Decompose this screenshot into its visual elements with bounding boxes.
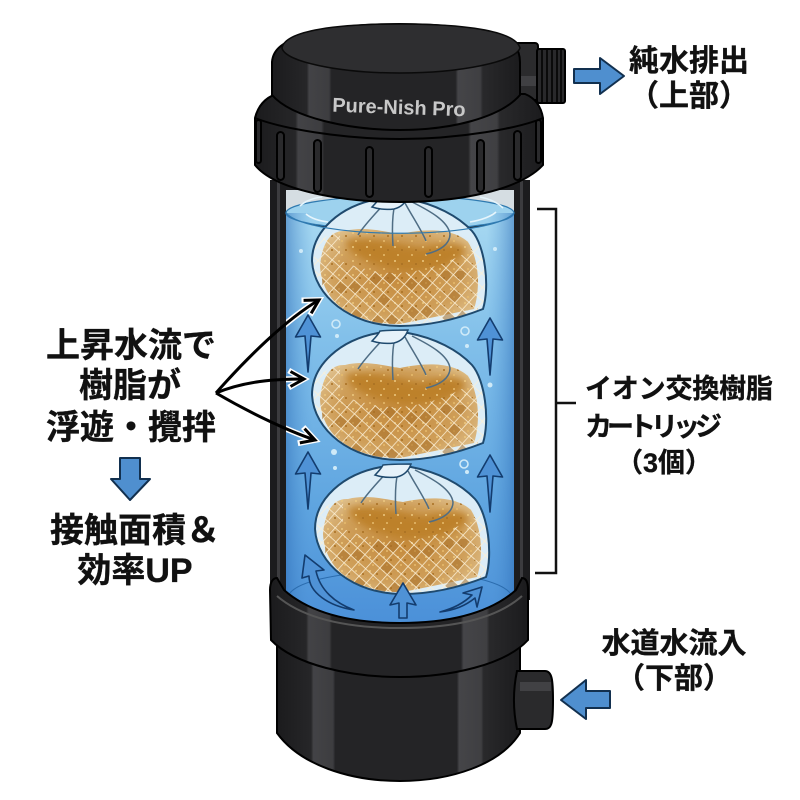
cartridge bag 2 [312, 330, 486, 462]
cartridge bag 3 [315, 464, 489, 596]
arrow: outlet [574, 58, 624, 94]
bracket [535, 209, 576, 573]
callout arrows to bags [216, 300, 319, 440]
label: purified water outlet [629, 45, 749, 113]
left explanation text: 上昇水流で [46, 327, 216, 365]
top cap [272, 24, 520, 130]
left explanation text: 樹脂が [79, 366, 181, 405]
swirl arrows at base [302, 555, 482, 612]
label: tap water inlet: （下部） [616, 662, 732, 695]
top collar [255, 94, 543, 202]
left explanation text [46, 327, 220, 590]
cartridge bag 1 [312, 196, 486, 328]
filter illustration [255, 24, 565, 781]
label: cartridges: イオン交換樹脂 [585, 374, 773, 404]
outlet port [513, 43, 565, 103]
label: tap water inlet: 水道水流入 [601, 627, 747, 660]
label: purified water outlet: 純水排出 [629, 45, 749, 78]
lower collar and base [270, 578, 528, 781]
callout arrow halos [286, 297, 324, 446]
left explanation text: 接触面積＆ [50, 512, 220, 550]
upward flow arrows [296, 315, 502, 618]
label: cartridges: （3個） [616, 448, 712, 478]
water surface front rim [286, 213, 514, 233]
brand name: Pure-Nish Pro [332, 95, 466, 121]
bubbles [299, 247, 497, 474]
glass tube with water [270, 180, 530, 630]
left explanation text: 浮遊・攪拌 [46, 409, 216, 447]
label: cartridges: カートリッジ [585, 412, 722, 442]
arrow: inlet [561, 680, 610, 719]
label: cartridges [585, 374, 773, 478]
arrow: result down [111, 458, 150, 500]
left explanation text: 効率UP [77, 552, 193, 590]
label: tap water inlet [601, 627, 747, 695]
inlet port [514, 671, 553, 729]
label: purified water outlet: （上部） [629, 80, 749, 113]
